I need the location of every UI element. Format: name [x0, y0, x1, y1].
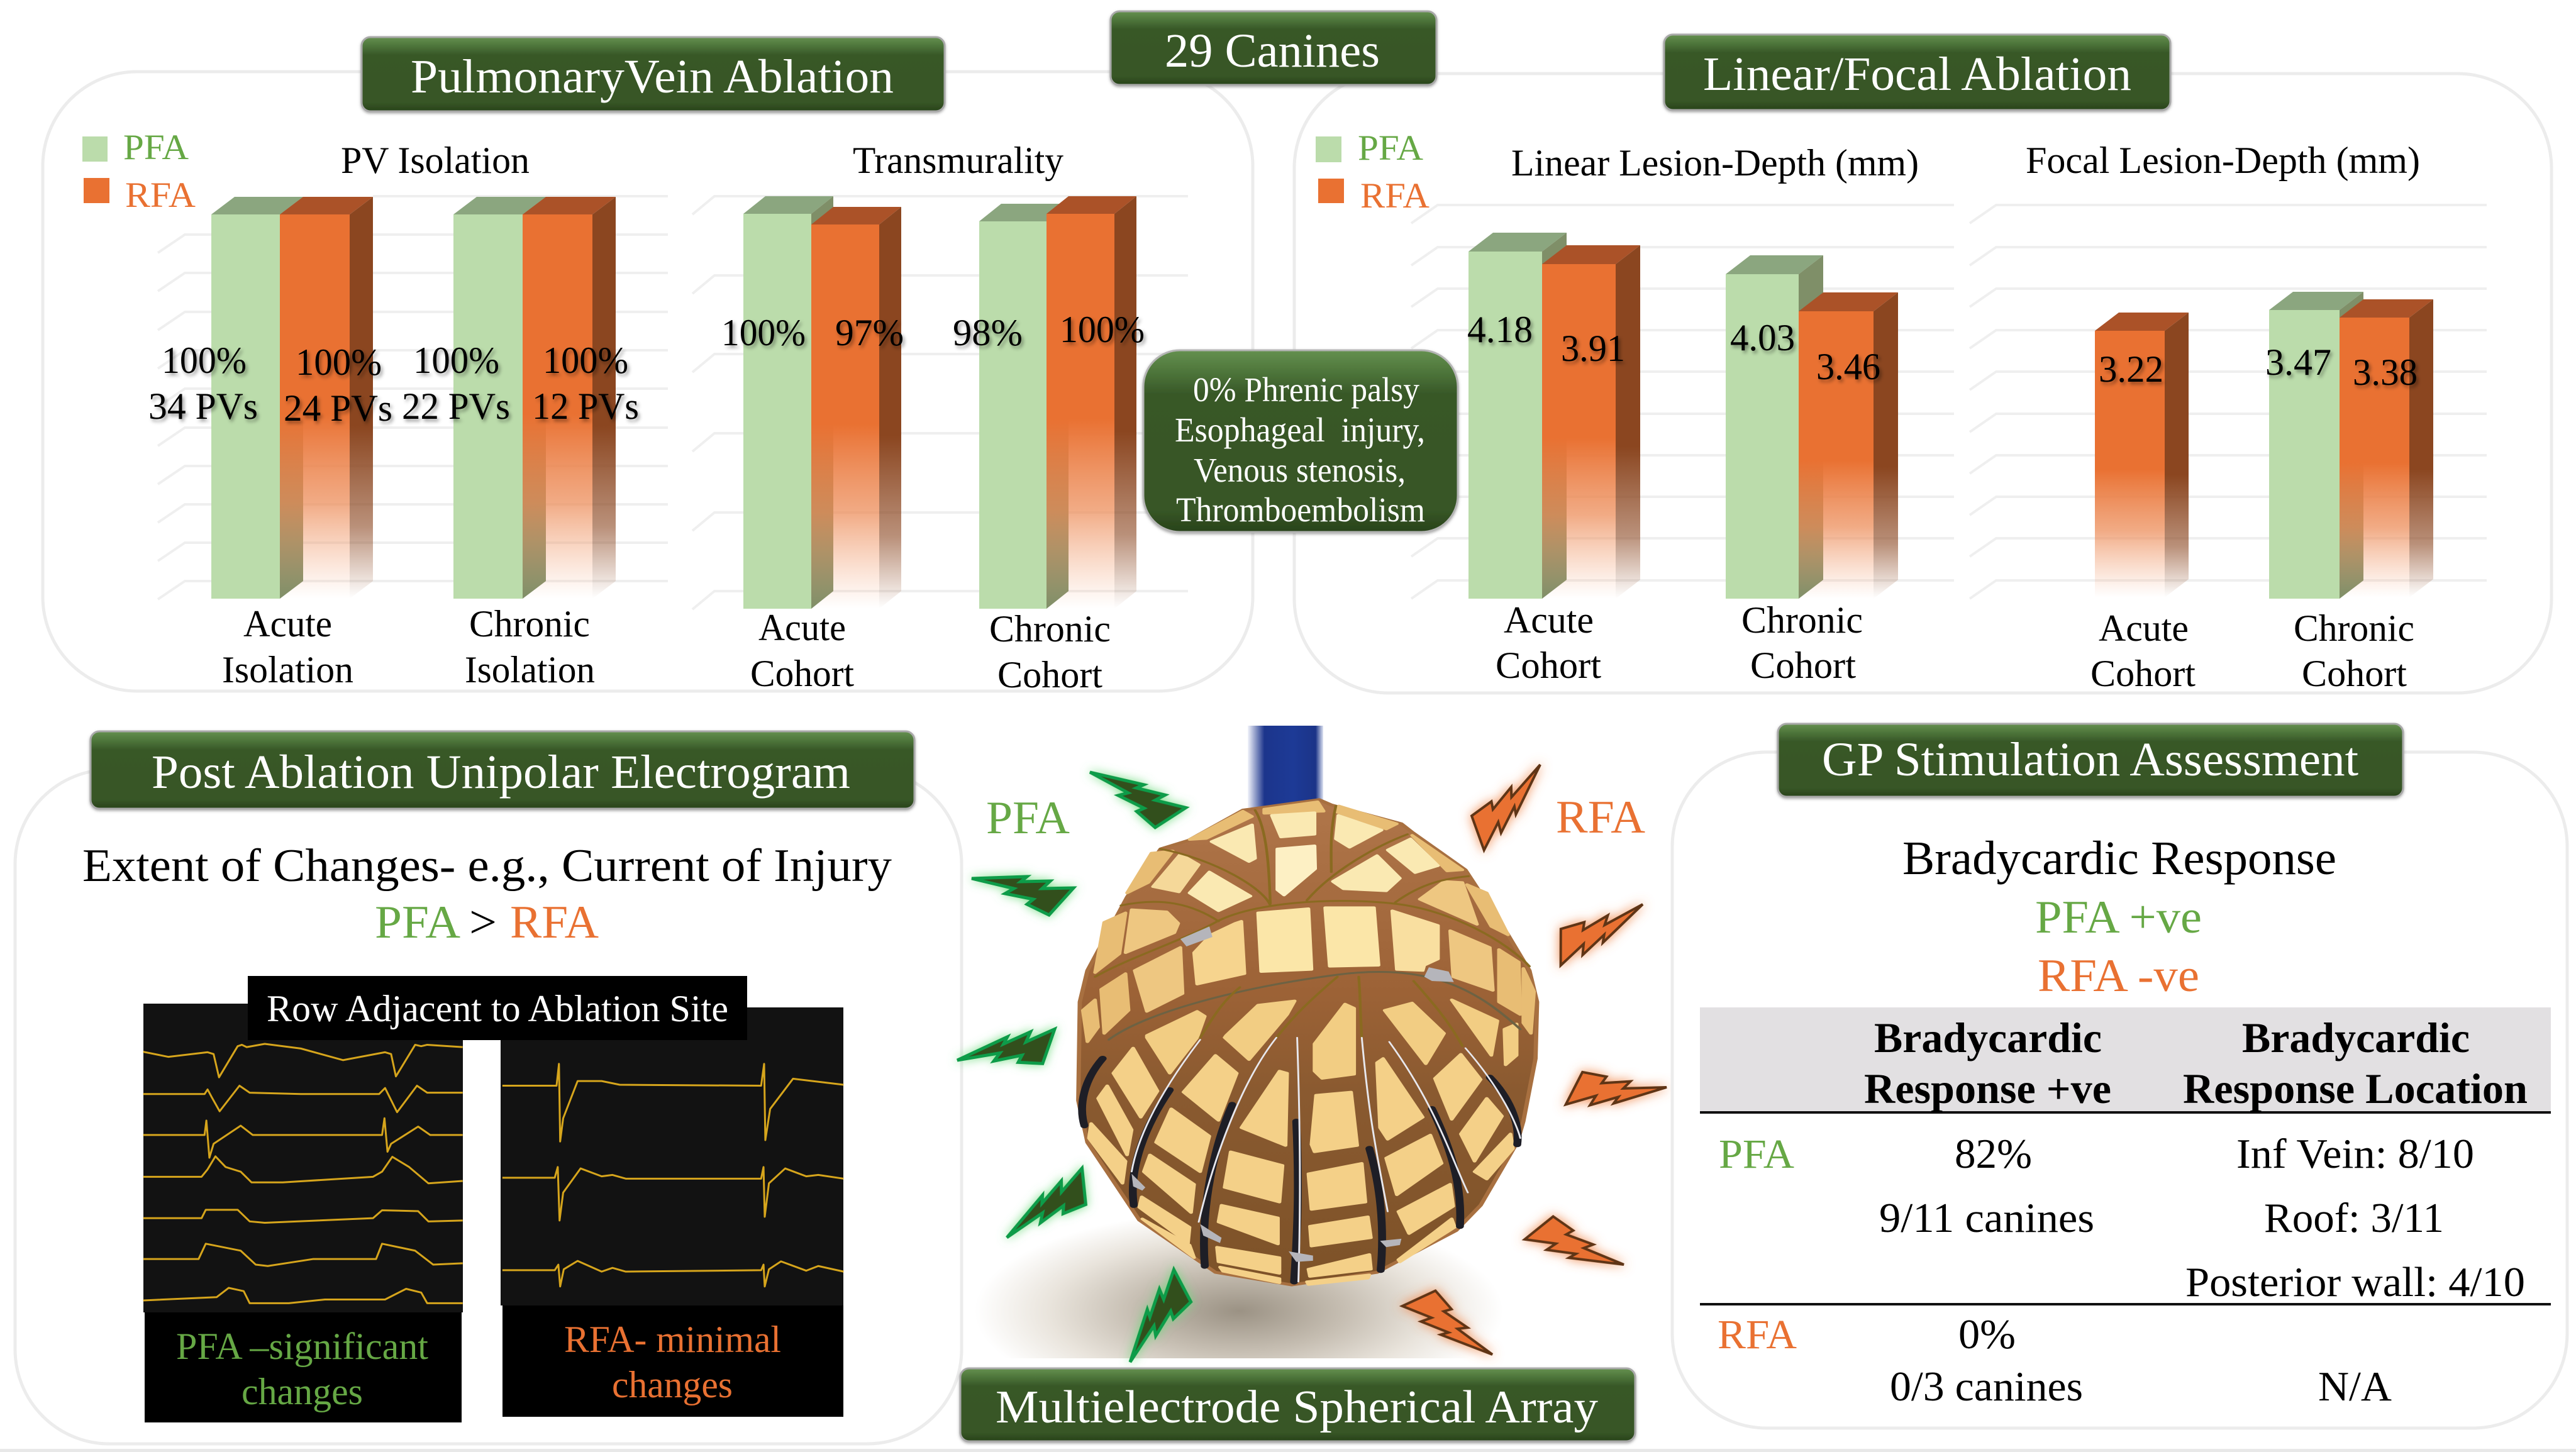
legend: PFA and RFA — [1316, 128, 1430, 216]
data labels: 100% — [296, 341, 382, 383]
data labels: 97% — [835, 312, 904, 353]
label: row adjacent to ablation site — [248, 976, 747, 1040]
electrode row and cap edges — [1095, 806, 1530, 1046]
silver solder joints — [1131, 926, 1454, 1262]
heading: Post Ablation Unipolar Electrogram — [91, 731, 914, 809]
heading: 29 Canines: 29 Canines — [1165, 25, 1380, 77]
table: bradycardic response results: Roof: 3/11 — [2264, 1195, 2444, 1241]
data labels — [1467, 309, 1880, 387]
heading: Pulmonary Vein Ablation — [362, 37, 945, 111]
axis labels: Acute — [2099, 607, 2189, 649]
chart: linear lesion depth: Linear Lesion-Depth (mm) — [1511, 142, 1919, 184]
data labels: 34 PVs — [148, 385, 258, 427]
label: row adjacent to ablation site: Row Adjacent to Ablation Site — [267, 988, 728, 1029]
electrogram: PFA traces: changes — [242, 1371, 363, 1412]
legend: PFA and RFA: RFA — [1360, 176, 1430, 216]
legend: PFA and RFA — [82, 128, 196, 215]
axis labels — [2090, 607, 2414, 694]
data labels: 3.91 — [1561, 328, 1625, 369]
heading: GP Stimulation Assessment — [1778, 724, 2403, 797]
axis labels: Isolation — [222, 649, 353, 690]
panel: pulmonary vein ablation — [43, 37, 1253, 696]
table: bradycardic response results: PFA — [1719, 1131, 1794, 1177]
panel: multielectrode spherical array — [957, 726, 1667, 1441]
axis labels: Isolation — [465, 649, 595, 690]
icon: orange lightning bolts — [1398, 748, 1667, 1356]
axis labels: Cohort — [750, 653, 854, 694]
text: extent of changes: Extent of Changes- e.g., Current of Injury — [82, 840, 892, 892]
data labels: 3.46 — [1816, 346, 1880, 387]
axis labels: Chronic — [2294, 607, 2414, 649]
table: bradycardic response results: Bradycardic — [2242, 1014, 2470, 1061]
text: extent of changes — [82, 840, 892, 948]
table: bradycardic response results: Response Location — [2183, 1065, 2528, 1112]
label: RFA: RFA — [1556, 792, 1645, 843]
table: bradycardic response results: 0% — [1958, 1311, 2016, 1358]
data labels: 100% — [1060, 309, 1145, 350]
axis labels: Cohort — [2302, 653, 2407, 694]
data labels: 24 PVs — [284, 387, 392, 429]
data labels: 4.18 — [1467, 309, 1533, 350]
legend: PFA and RFA: RFA — [125, 175, 196, 215]
text: bradycardic response summary: Bradycardic Response — [1902, 832, 2336, 885]
heading: Linear/Focal Ablation: Linear/Focal Ablation — [1703, 48, 2131, 101]
data labels — [2099, 341, 2418, 393]
data labels: 4.03 — [1730, 317, 1795, 358]
panel: post ablation unipolar electrogram — [15, 731, 962, 1444]
axis labels: Cohort — [997, 654, 1102, 696]
chart: linear lesion depth — [1411, 142, 1954, 686]
chart: PV isolation — [148, 140, 668, 690]
chart: focal lesion depth — [1970, 140, 2487, 694]
panel: linear and focal ablation — [1294, 35, 2551, 694]
axis labels — [750, 607, 1111, 696]
data labels: 12 PVs — [532, 385, 639, 427]
legend: PFA and RFA: PFA — [123, 128, 189, 167]
sphere body — [1079, 800, 1537, 1285]
table: bradycardic response results: Inf Vein: 8/10 — [2236, 1131, 2474, 1177]
callout: safety outcomes — [1143, 350, 1458, 532]
text: extent of changes: RFA — [510, 897, 599, 948]
chart: focal lesion depth: Focal Lesion-Depth (mm) — [2026, 140, 2420, 181]
text: extent of changes: PFA — [375, 897, 460, 948]
data labels: 3.47 — [2265, 341, 2331, 383]
axis labels: Chronic — [989, 608, 1111, 650]
axis labels — [1496, 599, 1863, 686]
upper cap electrodes — [1153, 812, 1438, 911]
table: bradycardic response results: 9/11 canines — [1879, 1195, 2094, 1241]
data labels: 100% — [413, 340, 499, 381]
data labels: 98% — [953, 312, 1023, 353]
heading: GP Stimulation Assessment: GP Stimulation Assessment — [1822, 733, 2358, 786]
chart: transmurality: Transmurality — [853, 140, 1063, 181]
chart: transmurality — [692, 140, 1188, 696]
chart: PV isolation: PV Isolation — [341, 140, 530, 181]
callout: safety outcomes: Thromboembolism — [1176, 490, 1425, 529]
table: bradycardic response results: 82% — [1955, 1131, 2032, 1177]
heading: 29 Canines — [1111, 11, 1436, 85]
text: bradycardic response summary: RFA -ve — [2038, 950, 2199, 1002]
heading: Post Ablation Unipolar Electrogram: Post Ablation Unipolar Electrogram — [152, 746, 850, 799]
text: extent of changes: > — [469, 897, 497, 948]
data labels: 22 PVs — [402, 385, 510, 427]
axis labels — [222, 603, 595, 690]
electrogram: RFA traces — [501, 1007, 843, 1417]
axis labels: Acute — [1504, 599, 1594, 641]
heading: Pulmonary Vein Ablation: PulmonaryVein Ablation — [411, 50, 894, 103]
text: bradycardic response summary — [1902, 832, 2336, 1002]
label: PFA: PFA — [986, 792, 1070, 844]
electrogram: RFA traces: RFA- minimal — [564, 1319, 781, 1360]
axis labels: Chronic — [469, 603, 590, 645]
illustration: spherical array with catheter — [957, 726, 1667, 1412]
outer tan edge cells — [1083, 802, 1534, 1042]
data labels — [148, 340, 639, 429]
heading: Multielectrode Spherical Array — [960, 1368, 1635, 1441]
data labels: 100% — [543, 340, 628, 381]
table: bradycardic response results: Bradycardic — [1874, 1014, 2102, 1061]
axis labels: Chronic — [1741, 599, 1863, 641]
text: bradycardic response summary: PFA +ve — [2035, 892, 2202, 943]
table: bradycardic response results: 0/3 canines — [1890, 1363, 2083, 1410]
table: bradycardic response results — [1700, 1007, 2551, 1410]
data labels: 3.38 — [2353, 352, 2418, 393]
table: bradycardic response results: RFA — [1718, 1312, 1797, 1358]
electrogram: PFA traces: PFA –significant — [176, 1326, 428, 1367]
electrogram: PFA traces — [143, 1004, 463, 1422]
axis labels: Acute — [758, 607, 846, 648]
electrogram: RFA traces: changes — [612, 1364, 733, 1405]
data labels — [721, 309, 1145, 353]
axis labels: Cohort — [1750, 645, 1856, 686]
metal spline gaps — [1082, 1058, 1518, 1282]
table: bradycardic response results: N/A — [2318, 1363, 2392, 1410]
data labels: 100% — [721, 312, 806, 353]
silver spline highlights — [1131, 1038, 1520, 1282]
callout: safety outcomes: 0% Phrenic palsy — [1193, 370, 1419, 409]
heading: Linear/Focal Ablation — [1664, 35, 2170, 110]
table: bradycardic response results: Response +ve — [1864, 1065, 2111, 1112]
axis labels: Cohort — [1496, 645, 1601, 686]
callout: safety outcomes: Venous stenosis, — [1194, 451, 1406, 489]
icon: green lightning bolts — [957, 770, 1199, 1375]
table: bradycardic response results: Posterior wall: 4/10 — [2185, 1259, 2525, 1305]
axis labels: Cohort — [2090, 653, 2196, 694]
legend: PFA and RFA: PFA — [1358, 128, 1423, 168]
lower spoke electrodes, lower half — [1089, 1048, 1513, 1285]
data labels: 100% — [162, 340, 247, 381]
axis labels: Acute — [243, 603, 332, 645]
band electrodes — [1194, 907, 1438, 984]
lower spoke electrodes — [1147, 1000, 1517, 1078]
data labels: 3.22 — [2099, 348, 2163, 390]
panel: GP stimulation assessment — [1672, 724, 2567, 1428]
heading: Multielectrode Spherical Array: Multielectrode Spherical Array — [996, 1382, 1598, 1433]
callout: safety outcomes: Esophageal injury, — [1175, 411, 1425, 449]
